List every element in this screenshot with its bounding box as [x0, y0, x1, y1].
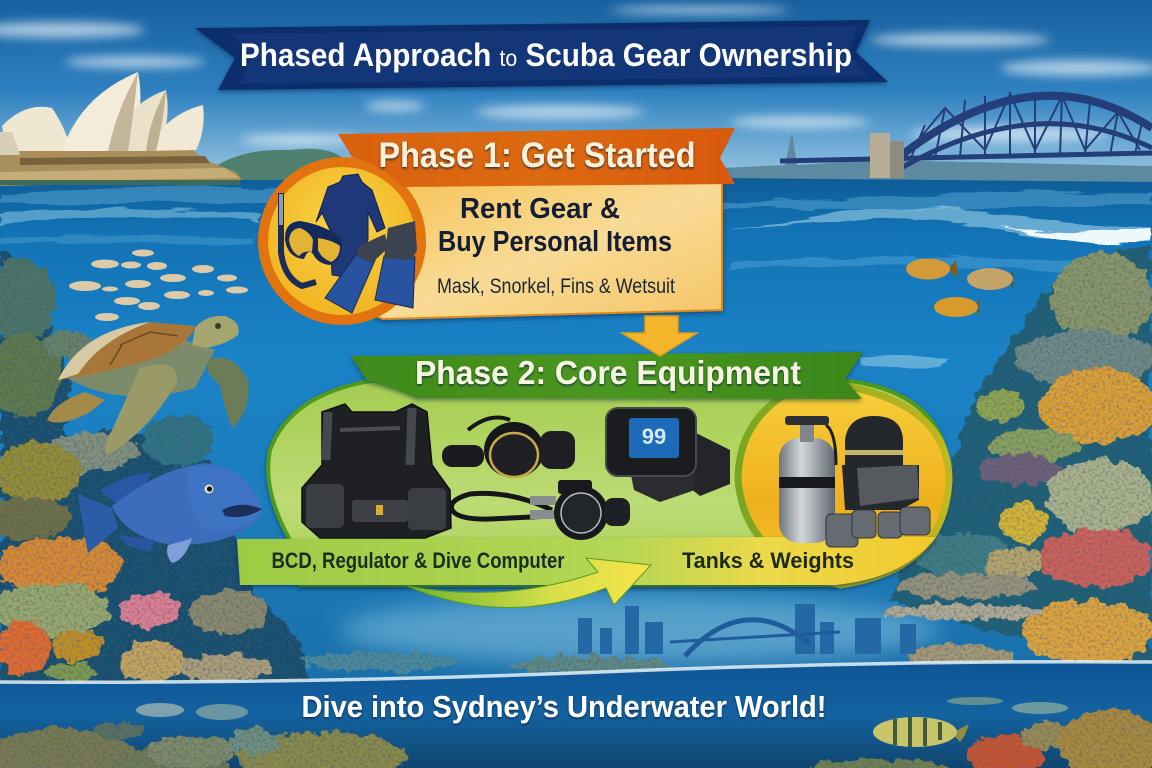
icon: sea turtle: [47, 316, 249, 455]
icon: regulator hose and second stage: [451, 480, 630, 540]
background: sea: [0, 178, 1152, 688]
icon: BCD vest: [302, 404, 451, 538]
left reef: [0, 250, 310, 684]
background: sky: [0, 0, 1152, 182]
phase 1 main text: Rent Gear &: [460, 193, 620, 225]
panel: phase 1: [258, 128, 735, 325]
icon circle: personal gear: [258, 157, 426, 325]
icon: fins: [325, 221, 417, 313]
phase 2 header ribbon: [351, 352, 863, 399]
icon: gear bag: [842, 416, 919, 510]
icon: dive computer: 99: [642, 424, 666, 449]
arrow: phase 1 to phase 2: [622, 316, 697, 356]
lower water band: [0, 662, 1152, 768]
icon: tank: [779, 416, 836, 543]
Sydney Harbour Bridge: [780, 92, 1152, 178]
central sea floor mound: [300, 652, 670, 674]
icon: snorkel: [281, 193, 316, 286]
right reef: [881, 245, 1152, 680]
icon: mask: [285, 221, 342, 265]
phase 1 heading: Phase 1: Get Started: [378, 136, 696, 175]
title text: Phased Approach to Scuba Gear Ownership: [240, 37, 852, 73]
panel: phase 1: Buy Personal Items: [438, 226, 672, 258]
icon: school of small fish: [69, 250, 248, 321]
clouds: [0, 6, 1152, 146]
arrow: curved yellow: [407, 558, 651, 608]
bottom reef: [0, 709, 1152, 768]
icon: dive computer: [606, 408, 730, 502]
waves: [0, 188, 1152, 368]
lower water light: [340, 596, 940, 664]
distant city and bridge underwater: [578, 604, 916, 656]
tanks and weights circle: [738, 381, 949, 585]
icon: weights: [826, 507, 930, 547]
label: tanks and weights: Tanks & Weights: [682, 548, 854, 573]
icon: regulator first stage: [442, 418, 575, 478]
title banner: [195, 20, 888, 90]
phase 2 heading: Phase 2: Core Equipment: [415, 354, 801, 391]
icon: yellow reef fish: [906, 258, 1013, 317]
icon: blue fish: [78, 463, 262, 563]
icon: wetsuit: [316, 174, 385, 277]
Sydney Opera House: [0, 72, 242, 186]
label: BCD, regulator and dive computer: BCD, Regulator & Dive Computer: [272, 548, 565, 573]
distant shoreline: [210, 132, 1152, 182]
phase 1 header ribbon: [338, 128, 735, 187]
bottom strip with labels: [237, 537, 936, 585]
phase 1 items text: Mask, Snorkel, Fins & Wetsuit: [437, 275, 675, 298]
icon: bottom fish: [136, 697, 1068, 747]
footer tagline: Dive into Sydney’s Underwater World!: [302, 689, 826, 724]
panel: phase 2: [237, 352, 949, 608]
